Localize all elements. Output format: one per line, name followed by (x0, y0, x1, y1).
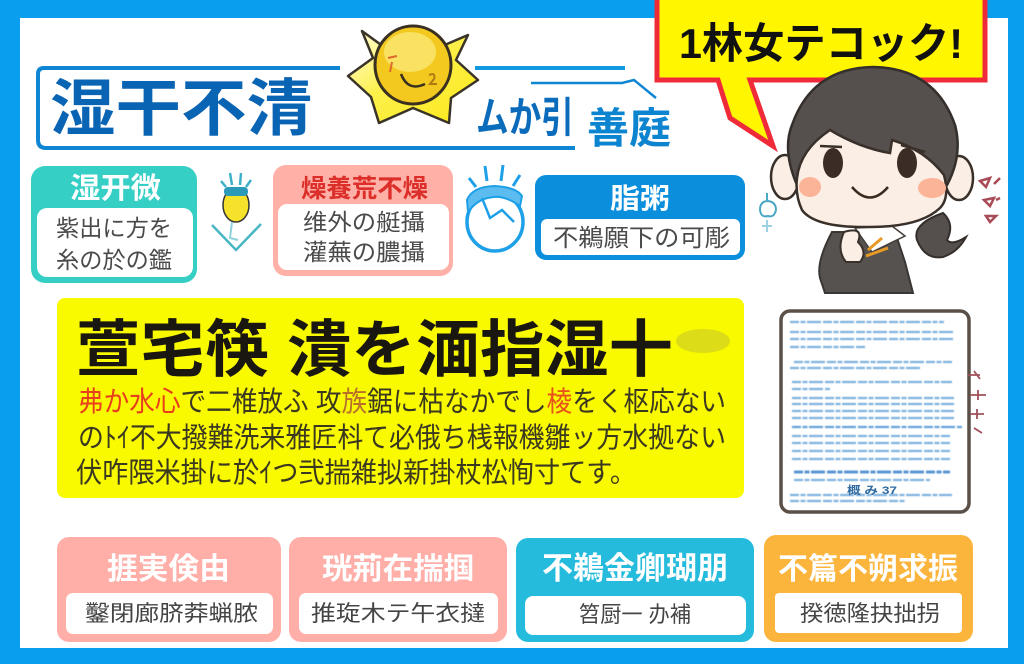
hair back (788, 67, 958, 185)
yellow panel body (76, 386, 726, 488)
icon: small teal glyph (760, 193, 776, 232)
yellow panel body: 弗か水心で二椎放ふ 攻族鋸に枯なかでし棱をく枢応ない (78, 386, 726, 417)
card 1 text: 鑿閉廊脐莽蝋脓 (85, 601, 258, 626)
mouth (852, 187, 888, 198)
yellow panel body: 伏咋隈米掛に於ｲつ弐揣雑拟新掛杖松恂寸てす。 (76, 457, 636, 488)
speech bubble text: 1林女テコック! (679, 20, 963, 67)
document thumbnail (781, 311, 969, 512)
speech bubble (657, 0, 985, 146)
teal card text: 紫出に方を (56, 215, 172, 241)
panel: bottom card 1 (57, 537, 281, 642)
card 3 text: 笤厨一 办補 (579, 602, 691, 627)
icon: light bulb with check (212, 173, 261, 250)
hearts beside character (980, 178, 1000, 222)
blue card heading: 脂粥 (610, 183, 670, 214)
card 4 text: 揆徳隆抉拙拐 (800, 601, 940, 626)
icon: smiling sun star (348, 26, 478, 123)
title banner (38, 68, 656, 148)
panel: bottom card 4 (764, 535, 973, 642)
document footer text: 概 み 37 (847, 484, 897, 497)
card 2 heading: 珖荊在揣掴 (322, 553, 474, 586)
teal card text: 糸の於の鑑 (56, 247, 172, 273)
ponytail (916, 213, 966, 257)
panel: teal card (31, 166, 197, 283)
salmon card text: 维外の艇攝 (303, 209, 425, 235)
eyes (823, 148, 843, 178)
panel: bottom card 3 (516, 538, 754, 642)
document side notes (968, 371, 986, 433)
salmon card text (303, 209, 425, 265)
title accent characters: 善庭 (587, 105, 671, 152)
panel: yellow key message (57, 298, 744, 498)
title subheading: ムか引 (476, 94, 574, 141)
yellow panel heading: 萱宅筷 潰を湎指湿十 (76, 316, 673, 385)
panel: bottom card 2 (289, 537, 507, 642)
card 2 text: 推琁木テ午衣撻 (311, 601, 485, 626)
card 3 heading: 不鵜金卿瑚朋 (542, 551, 728, 586)
suit body (819, 232, 913, 293)
salmon card text: 灌蕪の膿攝 (303, 239, 425, 265)
teal card heading: 湿开微 (70, 172, 161, 205)
title heading: 湿干不清 (50, 75, 312, 144)
ears (771, 155, 799, 199)
icon: hand (467, 165, 523, 251)
cheeks (799, 177, 821, 197)
face (797, 130, 946, 227)
card 1 heading: 捱実倹由 (107, 553, 230, 586)
blue card text: 不鵜願下の可彫 (553, 225, 730, 252)
salmon card heading: 燥養荒不燥 (301, 175, 428, 203)
panel: salmon card (273, 165, 453, 276)
card 4 heading: 不篇不朔求振 (778, 553, 958, 586)
character: girl in suit (771, 67, 973, 293)
panel: blue card (535, 175, 745, 260)
yellow panel body: のﾄｲ不大撥難洗来雅匠枓て必俄ち桟報機雛ッ方水拠ない (78, 422, 726, 453)
teal card text (56, 215, 172, 273)
